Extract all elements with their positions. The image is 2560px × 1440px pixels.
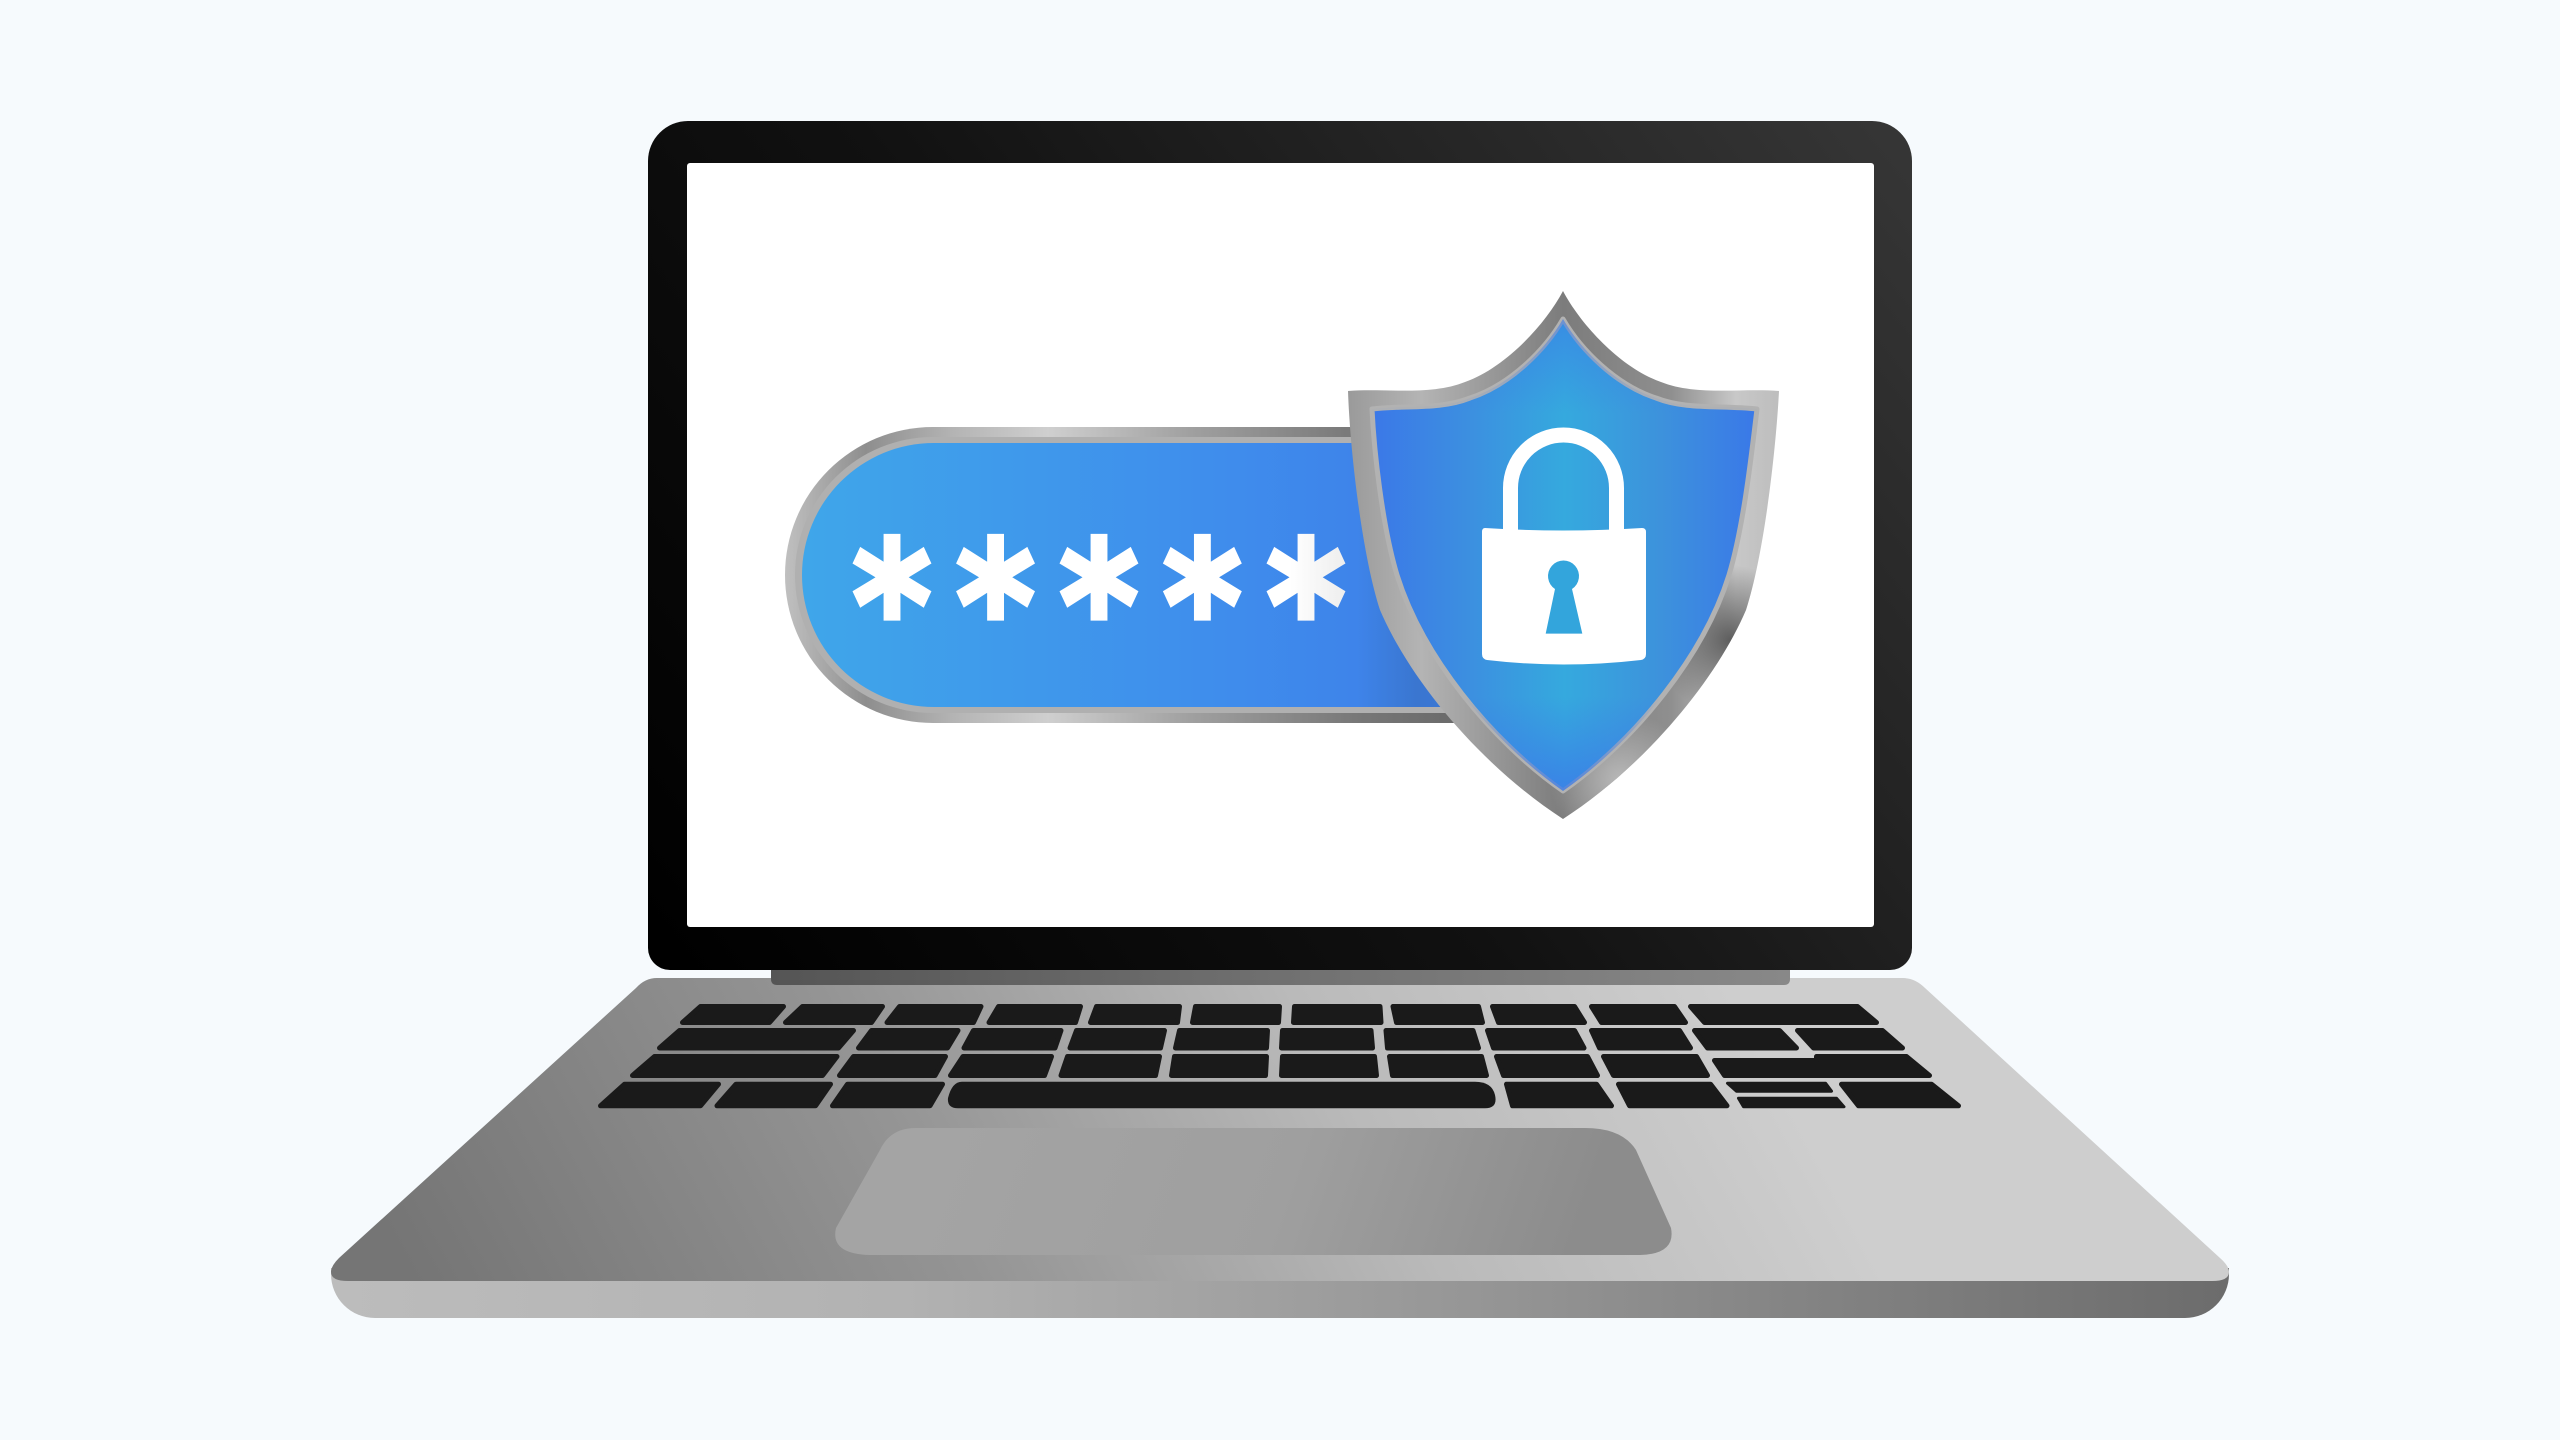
screen bezel (648, 121, 1912, 970)
password asterisks: ***** (852, 504, 1346, 709)
laptop base side edge (331, 1268, 2229, 1318)
shield rim shading (1562, 571, 1755, 814)
shield blue tip shading (1372, 319, 1757, 791)
password field (785, 427, 1480, 723)
keyboard (600, 1006, 1958, 1108)
laptop (331, 121, 2229, 1318)
screen (687, 163, 1874, 927)
keyboard row 1 (682, 1006, 1876, 1022)
hinge (771, 965, 1790, 985)
password field metal rim (785, 427, 1480, 723)
keyboard row 4 (600, 1082, 1958, 1108)
keyboard row 2 (660, 1030, 1902, 1048)
security shield (1348, 291, 1800, 830)
keyboard row 3 (632, 1056, 1930, 1076)
laptop deck surface (331, 978, 2229, 1281)
shield blue face (1372, 319, 1757, 791)
padlock shackle (1510, 435, 1616, 535)
padlock icon (1482, 435, 1646, 664)
password field inner rim (795, 437, 1480, 713)
padlock keyhole (1546, 561, 1582, 634)
shield metal rim (1348, 291, 1779, 819)
trackpad (835, 1128, 1672, 1255)
padlock body (1482, 528, 1646, 664)
password field blue fill (802, 443, 1480, 707)
